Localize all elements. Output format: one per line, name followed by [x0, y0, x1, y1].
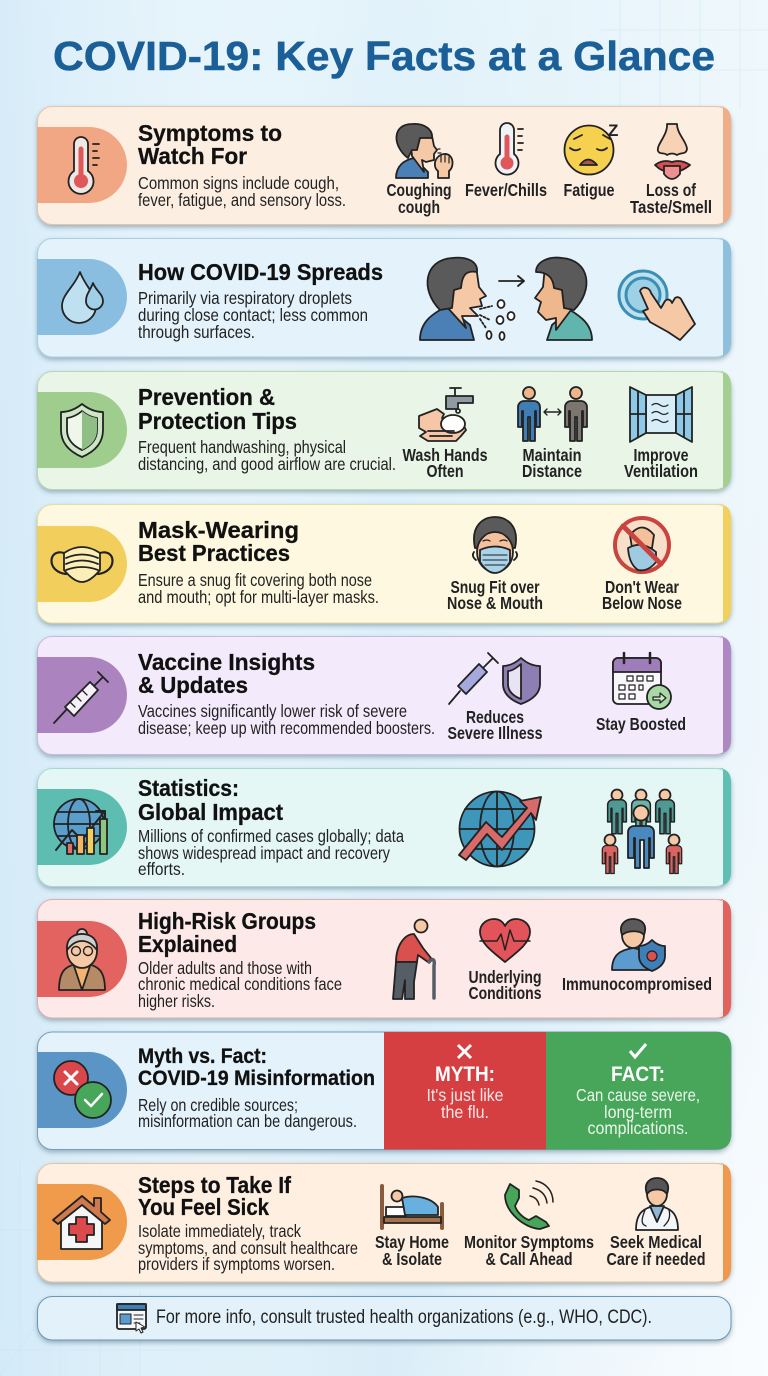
- icon: person exhaling: [420, 258, 486, 340]
- description: Isolate immediately, track: [138, 1221, 301, 1241]
- icon: syringe and shield: [449, 653, 540, 704]
- label: [386, 180, 452, 217]
- icon: nose and tongue: [655, 124, 690, 179]
- description: Rely on credible sources;: [138, 1095, 298, 1115]
- arrow: [499, 276, 524, 286]
- label: Reduces: [466, 707, 524, 727]
- fact box: [546, 1032, 731, 1150]
- label: Often: [426, 461, 464, 481]
- label: Immunocompromised: [562, 974, 712, 994]
- label: Snug Fit over: [450, 577, 540, 597]
- label: Loss of: [646, 180, 696, 200]
- heading: [138, 1172, 291, 1220]
- label: Stay Boosted: [596, 714, 686, 734]
- icon: thermometer: [68, 137, 99, 194]
- icon: syringe: [54, 672, 108, 723]
- description: [138, 288, 368, 342]
- fact box: long-term: [604, 1102, 672, 1122]
- description: fever, fatigue, and sensory loss.: [138, 190, 346, 210]
- heading: Watch For: [138, 143, 247, 169]
- panel: masks: [37, 504, 731, 623]
- description: symptoms, and consult healthcare: [138, 1238, 358, 1258]
- heading: [138, 517, 299, 566]
- fact box: FACT:: [611, 1063, 665, 1086]
- label: Underlying: [468, 967, 542, 987]
- heading: [138, 649, 315, 698]
- heading: Best Practices: [138, 540, 290, 566]
- description: and mouth; opt for multi-layer masks.: [138, 587, 379, 607]
- myth box: MYTH:: [435, 1063, 495, 1086]
- panel: vaccines: [37, 636, 731, 754]
- fact box: complications.: [588, 1118, 688, 1138]
- icon: calendar: [613, 653, 671, 709]
- heading: Prevention &: [138, 384, 275, 410]
- heading: COVID-19 Misinformation: [138, 1066, 375, 1090]
- icon: crowd: [602, 790, 682, 874]
- icon: masked face: [473, 517, 517, 573]
- heading: Explained: [138, 931, 237, 957]
- heading: You Feel Sick: [138, 1194, 270, 1220]
- description: [138, 701, 435, 738]
- footer text: For more info, consult trusted health organizations (e.g., WHO, CDC).: [156, 1307, 652, 1328]
- icon: globe and bar chart: [54, 799, 107, 854]
- heading: [138, 1044, 375, 1090]
- icon: bed: [382, 1186, 442, 1228]
- icon: doctor: [636, 1178, 678, 1230]
- icon: house with medical cross: [53, 1196, 110, 1249]
- label: Nose & Mouth: [447, 593, 543, 613]
- panel: if you feel sick: [37, 1163, 731, 1282]
- panel: prevention: [37, 371, 731, 490]
- myth box: It's just like: [426, 1085, 504, 1105]
- label: Below Nose: [602, 593, 682, 613]
- description: [138, 826, 404, 879]
- description: providers if symptoms worsen.: [138, 1254, 335, 1274]
- description: during close contact; less common: [138, 305, 368, 325]
- label: Maintain: [522, 445, 582, 465]
- label: [375, 1232, 449, 1269]
- footer banner: [38, 1296, 731, 1340]
- icon: phone call: [505, 1181, 553, 1229]
- label: [606, 1232, 706, 1269]
- label: [402, 445, 488, 481]
- label: cough: [398, 197, 440, 217]
- icon: globe with rising arrow: [459, 792, 541, 866]
- icon: browser window: [117, 1304, 146, 1333]
- description: [138, 437, 396, 474]
- icon: mask: [52, 547, 112, 582]
- panel: high-risk groups: [37, 899, 731, 1018]
- icon: tired face: [564, 121, 618, 174]
- description: higher risks.: [138, 991, 215, 1011]
- heading: Global Impact: [138, 799, 283, 825]
- description: [138, 1095, 357, 1131]
- label: Stay Home: [375, 1232, 449, 1252]
- fact box: Can cause severe,: [576, 1085, 700, 1105]
- description: Older adults and those with: [138, 958, 312, 978]
- heading: [138, 120, 282, 169]
- label: [448, 707, 543, 743]
- heading: High-Risk Groups: [138, 908, 316, 934]
- description: Millions of confirmed cases globally; data: [138, 826, 404, 846]
- heading: How COVID-19 Spreads: [138, 259, 383, 285]
- icon: immunocompromised person: [612, 919, 665, 971]
- label: Fatigue: [564, 180, 615, 200]
- description: Common signs include cough,: [138, 173, 339, 193]
- description: [138, 1221, 358, 1274]
- description: efforts.: [138, 859, 185, 879]
- heading: [138, 384, 297, 434]
- label: [468, 967, 542, 1003]
- heading: [138, 775, 283, 825]
- description: through surfaces.: [138, 322, 255, 342]
- icon: tired face: Z: [608, 121, 618, 140]
- icon: touching surface: [619, 271, 695, 340]
- icon: cross and check: [54, 1061, 111, 1118]
- icon: coughing person: [396, 124, 453, 178]
- icon: person receiving: [535, 258, 592, 340]
- description: distancing, and good airflow are crucial.: [138, 454, 396, 474]
- myth box: the flu.: [441, 1102, 489, 1122]
- heading: Mask-Wearing: [138, 517, 299, 543]
- title: COVID-19: Key Facts at a Glance: [53, 33, 715, 79]
- description: [138, 958, 342, 1011]
- description: disease; keep up with recommended boosters.: [138, 718, 435, 738]
- icon: shield: [61, 404, 103, 457]
- description: Primarily via respiratory droplets: [138, 288, 352, 308]
- icon: prohibited mask: [615, 518, 669, 572]
- heading: Steps to Take If: [138, 1172, 291, 1198]
- label: Monitor Symptoms: [464, 1232, 594, 1252]
- icon: grandmother: [59, 929, 105, 990]
- panel: myth vs fact: [37, 1032, 731, 1150]
- label: Improve: [634, 445, 689, 465]
- icon: elderly person with cane: [393, 920, 434, 999]
- description: misinformation can be dangerous.: [138, 1111, 357, 1131]
- label: [602, 577, 682, 613]
- label: Coughing: [386, 180, 452, 200]
- heading: Protection Tips: [138, 408, 297, 434]
- heading: Vaccine Insights: [138, 649, 315, 675]
- panel: spread: [37, 238, 731, 357]
- label: Distance: [522, 461, 582, 481]
- icon: droplets: [62, 272, 103, 323]
- heading: & Updates: [138, 672, 248, 698]
- description: Vaccines significantly lower risk of severe: [138, 701, 407, 721]
- icon: distancing: [518, 387, 587, 441]
- label: [464, 1232, 594, 1269]
- label: [522, 445, 582, 481]
- label: Taste/Smell: [630, 197, 712, 217]
- icon: heart with pulse: [480, 919, 530, 962]
- description: shows widespread impact and recovery: [138, 843, 390, 863]
- description: chronic medical conditions face: [138, 974, 342, 994]
- icon: open window: [630, 387, 692, 442]
- icon: handwashing: [419, 388, 473, 441]
- label: Fever/Chills: [465, 180, 547, 200]
- label: Don't Wear: [605, 577, 679, 597]
- label: [447, 577, 543, 613]
- description: Ensure a snug fit covering both nose: [138, 570, 372, 590]
- label: & Call Ahead: [486, 1249, 572, 1269]
- description: [138, 570, 379, 607]
- label: [630, 180, 712, 217]
- label: & Isolate: [382, 1249, 442, 1269]
- description: [138, 173, 346, 210]
- label: Wash Hands: [402, 445, 488, 465]
- icon: fever thermometer: [496, 123, 523, 175]
- label: [624, 445, 698, 481]
- panel: symptoms: [37, 106, 731, 224]
- heading: Symptoms to: [138, 120, 282, 146]
- label: Severe Illness: [448, 723, 543, 743]
- heading: [138, 908, 316, 957]
- label: Seek Medical: [610, 1232, 702, 1252]
- label: Conditions: [468, 983, 542, 1003]
- label: Ventilation: [624, 461, 698, 481]
- label: Care if needed: [606, 1249, 706, 1269]
- panel: statistics: [37, 768, 731, 886]
- heading: Myth vs. Fact:: [138, 1044, 267, 1068]
- myth box: [384, 1032, 546, 1150]
- heading: Statistics:: [138, 775, 239, 801]
- description: Frequent handwashing, physical: [138, 437, 346, 457]
- droplets spray: [480, 300, 514, 340]
